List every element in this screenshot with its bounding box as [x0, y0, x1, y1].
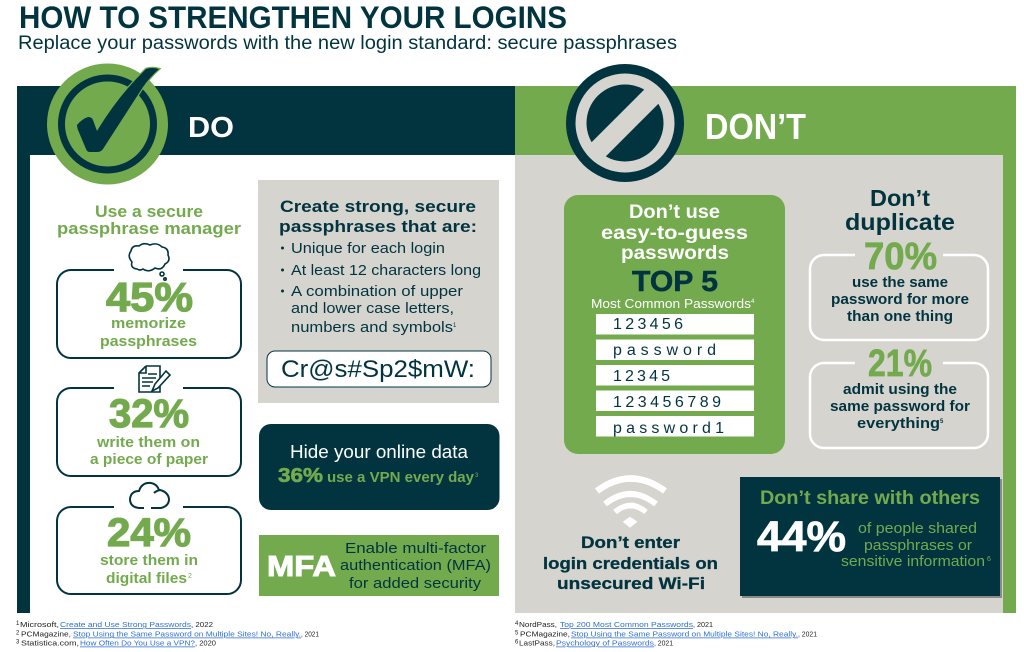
icon: cloud	[130, 483, 169, 508]
wi-fi warning text	[543, 533, 718, 593]
passphrase manager heading	[57, 202, 241, 238]
panel: create strong passphrases: passphrases that are:	[279, 217, 477, 236]
callout: don't share with others: 6	[987, 556, 991, 563]
callout: hide your online data	[259, 424, 500, 510]
bullet list	[281, 240, 481, 336]
title: HOW TO STRENGTHEN YOUR LOGINS	[19, 0, 567, 35]
stat card: 45% memorize: passphrases	[100, 333, 197, 350]
password list: 12345	[613, 368, 670, 385]
don't duplicate heading: duplicate	[845, 209, 955, 235]
don't heading: DON’T	[705, 106, 806, 147]
callout: don't share with others: sensitive information	[841, 553, 985, 570]
footnotes: left: PCMagazine,	[21, 630, 71, 638]
callout: multi-factor authentication	[259, 535, 499, 596]
bullet list: numbers and symbols	[291, 319, 453, 336]
footnotes: left: Statistica.com,	[21, 638, 79, 648]
callout: don't share with others: 44%	[757, 513, 846, 561]
callout: multi-factor authentication: Enable multi-factor	[345, 540, 486, 557]
callout: hide your online data: 3	[475, 473, 479, 479]
stat card: 32% write on paper: a piece of paper	[90, 451, 208, 468]
callout: hide your online data: Hide your online data	[290, 442, 469, 462]
footnotes: right: , 2021	[693, 620, 713, 629]
footnotes: right: 4	[515, 621, 519, 627]
don't panel background	[515, 86, 1016, 613]
bullet list: At least 12 characters long	[291, 262, 481, 279]
panel: easy-to-guess passwords: 4	[751, 299, 755, 305]
panel: easy-to-guess passwords	[564, 195, 785, 454]
footnotes: left: Microsoft,	[20, 620, 59, 629]
icon: paper and pen	[139, 366, 170, 392]
icon: thought cloud	[129, 244, 169, 280]
bullet list: 1	[453, 323, 457, 329]
password list: password	[613, 342, 716, 359]
icon: prohibition sign	[566, 64, 684, 182]
passphrase manager heading: passphrase manager	[57, 219, 241, 238]
wi-fi warning text: login credentials on	[543, 554, 718, 573]
callout: hide your online data: use a VPN every day	[327, 470, 474, 486]
panel: create strong passphrases: Create strong, secure	[280, 197, 476, 216]
footnotes: left: 3	[16, 640, 20, 646]
stat card: 70%: use the same	[852, 274, 948, 291]
panel: do	[17, 64, 515, 613]
stat card: 70%: than one thing	[847, 308, 953, 325]
stat card: 21%: everything	[857, 415, 940, 432]
wi-fi warning text: Don’t enter	[581, 533, 680, 552]
callout: don't share with others: passphrases or	[864, 537, 972, 554]
panel: easy-to-guess passwords: passwords	[621, 242, 729, 264]
stat card: 70%: 70%	[864, 236, 937, 278]
footnotes: right: NordPass,	[519, 620, 557, 629]
stat card: 45% memorize	[57, 270, 241, 358]
wi-fi warning text: unsecured Wi-Fi	[557, 574, 705, 593]
stat card: 21%: 5	[940, 419, 944, 425]
don't panel body	[515, 155, 1003, 613]
panel: easy-to-guess passwords: TOP 5	[632, 266, 718, 298]
stat card: 21%: same password for	[830, 398, 970, 415]
footnotes: right: Stop Using the Same Password on Multiple Sites! No, Really.	[571, 630, 798, 638]
password list: 123456789	[613, 394, 721, 411]
bullet list: A combination of upper	[291, 283, 463, 300]
panel: easy-to-guess passwords: easy-to-guess	[601, 222, 748, 244]
footnotes: right: 5	[515, 630, 519, 636]
bullet list: Unique for each login	[291, 240, 445, 257]
do panel body	[30, 155, 515, 613]
footnotes: right: LastPass,	[519, 638, 555, 648]
stat card: 24% digital files: 24%	[107, 511, 191, 555]
callout: multi-factor authentication: for added security	[349, 575, 482, 592]
callout: multi-factor authentication: authentication (MFA)	[340, 557, 491, 574]
do heading: DO	[188, 112, 234, 144]
stat card: 21%: 21%	[868, 343, 932, 385]
subtitle: Replace your passwords with the new login standard: secure passphrases	[18, 33, 677, 54]
footnotes: left: How Often Do You Use a VPN?	[80, 638, 195, 648]
stat card: 24% digital files	[57, 507, 241, 594]
password list: 123456	[613, 316, 683, 333]
do panel background	[17, 86, 515, 613]
stat card: 45% memorize: memorize	[111, 315, 186, 332]
callout: multi-factor authentication: MFA	[267, 551, 336, 583]
callout: hide your online data: 36%	[278, 465, 323, 487]
footnotes: left: , 2021	[301, 630, 319, 638]
footnotes: right: 6	[515, 640, 519, 646]
stat card: 70%	[810, 236, 988, 340]
example passphrase: Cr@s#Sp2$mW:	[281, 356, 475, 383]
stat card: 32% write on paper: write them on	[96, 434, 200, 451]
footnotes: left: , 2020	[195, 638, 216, 648]
stat card: 24% digital files: store them in	[100, 552, 198, 569]
footnotes: right: , 2021	[798, 630, 817, 638]
icon: check mark badge	[47, 64, 168, 184]
footnotes: left: Stop Using the Same Password on Multiple Sites! No, Really.	[73, 630, 301, 638]
footnotes: right: , 2021	[654, 638, 673, 648]
don't duplicate heading	[845, 185, 955, 235]
footnotes: left: , 2022	[191, 620, 213, 629]
callout: don't share with others: of people shared	[858, 520, 977, 537]
stat card: 32% write on paper: 32%	[109, 392, 189, 436]
callout: don't share with others	[740, 477, 1002, 598]
footnotes: left: 2	[16, 630, 20, 636]
panel: don't	[515, 64, 1016, 613]
passphrase manager heading: Use a secure	[95, 202, 203, 221]
panel: easy-to-guess passwords: Don’t use	[629, 201, 720, 223]
panel: easy-to-guess passwords: Most Common Passwords	[591, 296, 752, 311]
footnotes: left: Create and Use Strong Passwords	[60, 620, 191, 629]
password list	[596, 314, 754, 437]
icon: wi-fi	[597, 478, 665, 528]
footnotes: left	[16, 620, 319, 648]
stat card: 45% memorize: 45%	[106, 274, 193, 320]
stat card: 24% digital files: 2	[188, 573, 192, 580]
panel: create strong passphrases	[258, 180, 499, 403]
bullet list: and lower case letters,	[291, 300, 454, 317]
footnotes: right: PCMagazine,	[520, 630, 570, 638]
password list: password1	[613, 420, 724, 437]
footnotes: right	[515, 620, 817, 648]
stat card: 32% write on paper	[57, 388, 241, 476]
footnotes: right: Psychology of Passwords	[556, 638, 654, 648]
callout: don't share with others: Don’t share with others	[760, 488, 980, 509]
stat card: 70%: password for more	[831, 291, 969, 308]
footnotes: left: 1	[16, 621, 20, 627]
stat card: 21%: admit using the	[843, 381, 957, 398]
stat card: 24% digital files: digital files	[106, 570, 187, 587]
footnotes: right: Top 200 Most Common Passwords	[560, 620, 693, 629]
example passphrase	[267, 351, 491, 387]
don't duplicate heading: Don’t	[870, 185, 930, 211]
stat card: 21%	[810, 343, 988, 448]
